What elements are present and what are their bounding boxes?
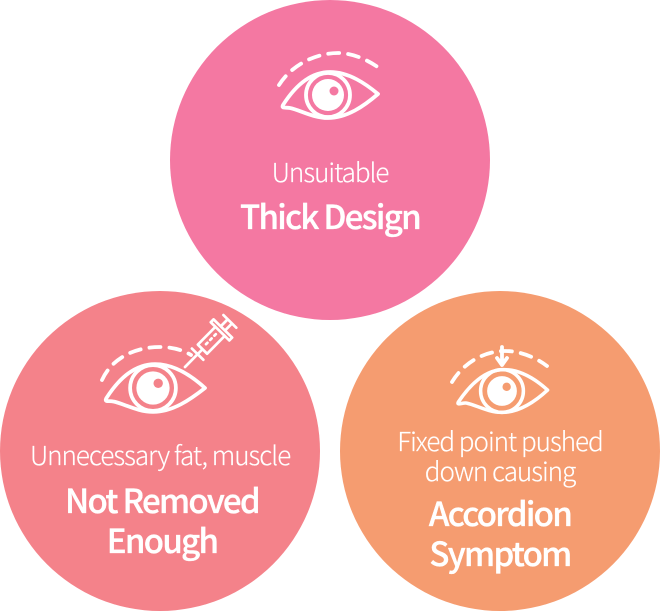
heading: accordion symptom: Symptom	[429, 528, 571, 576]
heading: not removed enough	[65, 475, 259, 563]
icon: eye with syringe	[102, 312, 239, 412]
panel: accordion symptom circle	[340, 291, 660, 611]
heading: thick design: Thick Design	[240, 191, 420, 239]
heading: accordion symptom: Accordion	[429, 488, 571, 536]
heading: not removed enough: Enough	[107, 515, 217, 563]
text: fixed point pushed down causing: Fixed point pushed	[397, 422, 603, 459]
text: unnecessary fat, muscle: Unnecessary fat, muscle	[30, 436, 290, 473]
heading: not removed enough: Not Removed	[65, 475, 259, 523]
icon: eye with dashed brow	[279, 53, 379, 118]
text: fixed point pushed down causing	[397, 422, 603, 489]
icon: eye with arrow	[452, 347, 548, 412]
heading: accordion symptom	[429, 488, 571, 576]
text: unsuitable: Unsuitable	[272, 153, 388, 190]
text: fixed point pushed down causing: down causing	[425, 452, 576, 489]
panel: not removed enough circle	[0, 291, 320, 611]
panel: thick design circle	[170, 0, 490, 320]
